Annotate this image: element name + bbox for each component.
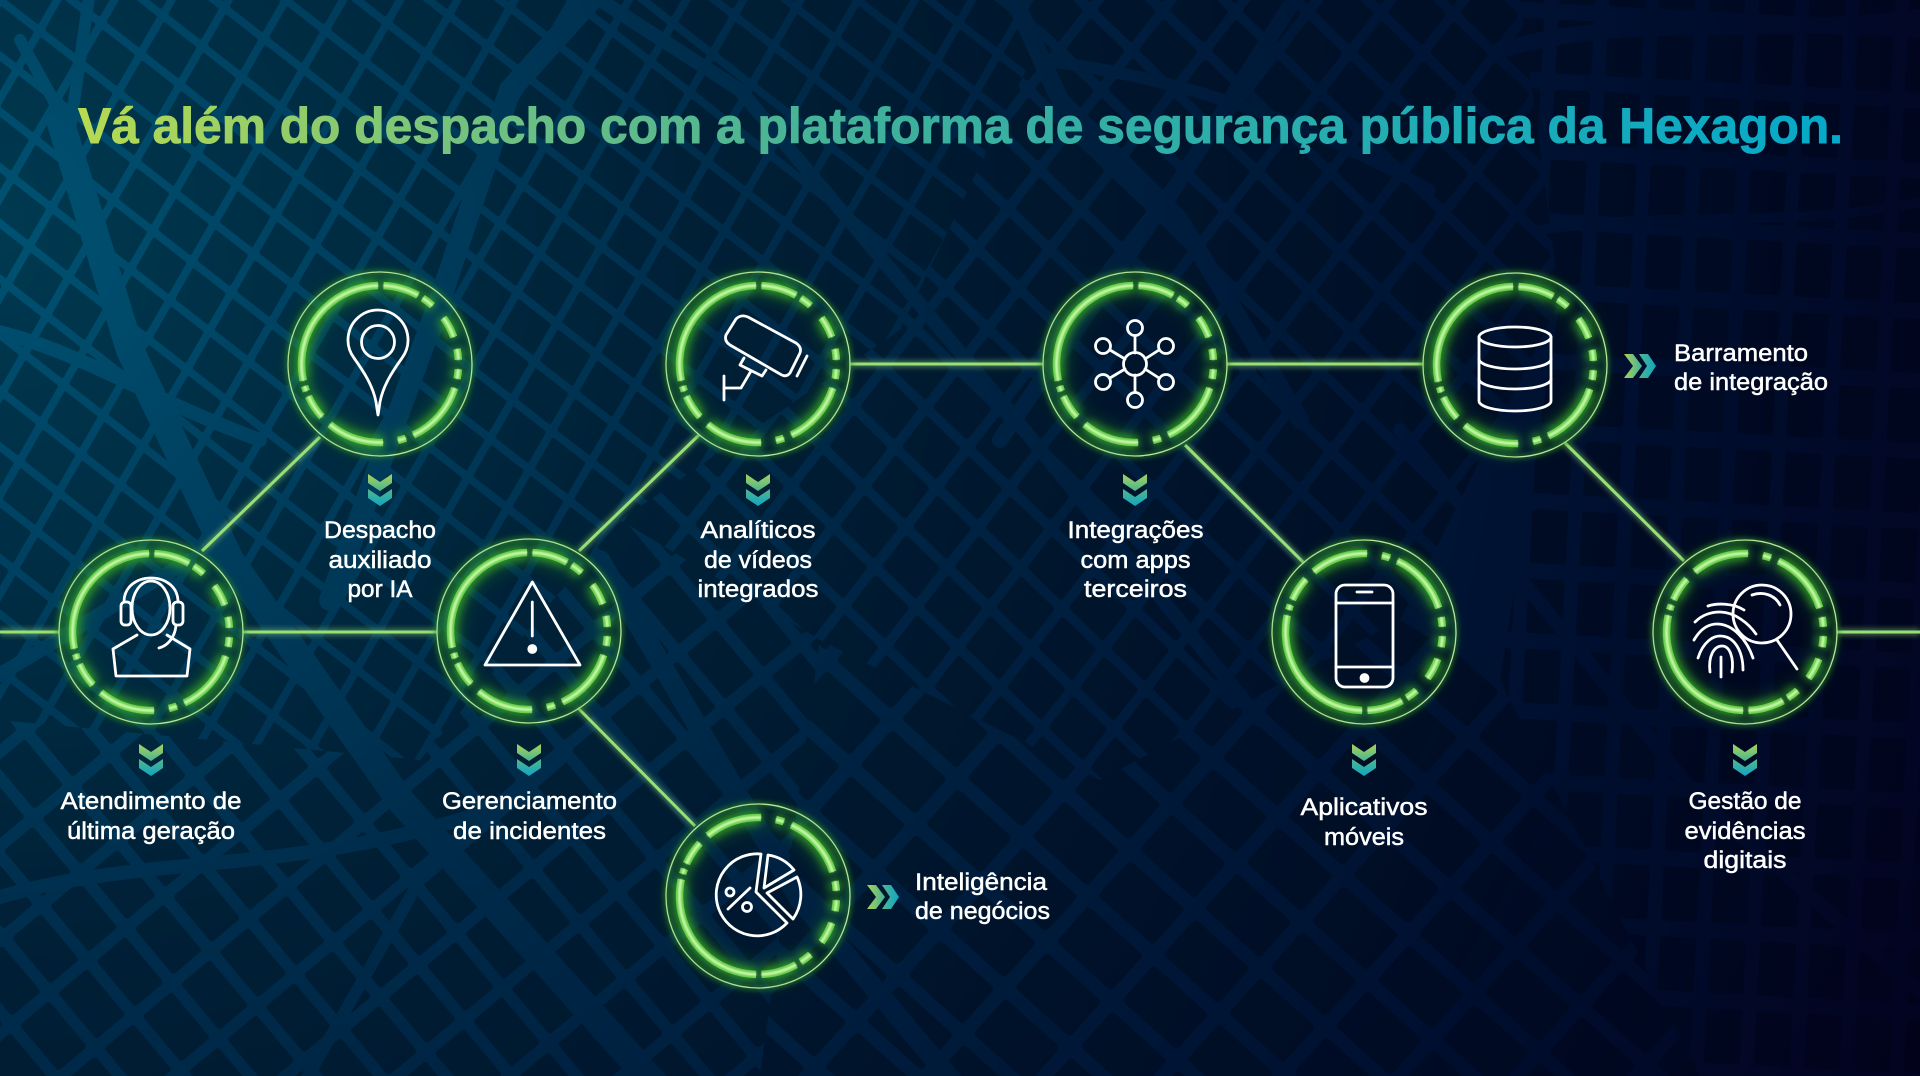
ring [1653,540,1837,724]
label: digitais [1704,847,1786,874]
chevron down [1733,744,1757,776]
label: evidências [1684,818,1806,845]
icon: smartphone [1336,585,1393,687]
label: por IA [348,576,413,603]
label: Integrações [1068,517,1204,544]
label [324,517,436,603]
ring [1043,272,1227,456]
label: móveis [1324,824,1404,851]
node: Analíticos de vídeos integrados [666,272,850,603]
label: de integração [1674,369,1828,396]
label: de vídeos [704,547,812,574]
label: Despacho [324,517,436,544]
connector: Analíticos to Integrações [850,362,1043,366]
label: Aplicativos [1300,794,1428,821]
icon: warning triangle [485,582,580,665]
label: Analíticos [700,517,816,544]
chevron down [368,474,392,506]
label: Barramento [1674,340,1808,367]
label [442,788,617,845]
node: Integrações com apps terceiros [1043,272,1227,603]
connector: Integrações to Barramento [1227,362,1423,366]
label [1674,340,1828,396]
label: com apps [1080,547,1190,574]
label: de incidentes [453,818,606,845]
label: Gerenciamento [442,788,617,815]
chevron right [1624,354,1656,378]
icon: network hub [1096,320,1174,408]
ring [59,540,243,724]
icon: pie chart [716,854,801,936]
ring [666,804,850,988]
label: terceiros [1084,576,1187,603]
node: Atendimento de última geração [59,540,243,845]
label: auxiliado [328,547,432,574]
chevron down [1352,744,1376,776]
connector: Barramento to Gestão [1565,443,1684,561]
node: Gerenciamento de incidentes [437,539,621,845]
label [1684,788,1806,874]
label: última geração [67,818,235,845]
label: de negócios [915,898,1050,925]
chevron down [1123,474,1147,506]
ring [666,272,850,456]
icon: security camera [724,316,807,400]
icon: database [1479,327,1551,411]
connector: Atendimento to Gerenciamento [243,630,437,634]
connector: Gerenciamento to Inteligência [578,708,695,826]
chevron down [746,474,770,506]
label [60,788,242,845]
label: integrados [698,576,818,603]
title: Vá além do despacho com a plataforma de segurança pública da Hexagon. [78,98,1843,154]
chevron right [867,885,899,909]
connector: Gerenciamento to Analíticos [579,435,699,551]
label: Atendimento de [60,788,242,815]
ring [1423,273,1607,457]
icon: map pin [348,310,408,415]
label [1068,517,1204,603]
ring [288,272,472,456]
node: Despacho auxiliado por IA [288,272,472,603]
node: Inteligência de negócios [666,804,1050,988]
ring [1272,540,1456,724]
connector: Integrações to Aplicativos [1185,445,1304,563]
ring [437,539,621,723]
connector lines [0,364,1920,826]
label [915,869,1050,925]
label: Inteligência [915,869,1047,896]
icon: headset agent [113,578,190,676]
connector: left edge to Atendimento [0,630,59,634]
node: Aplicativos móveis [1272,540,1456,851]
node: Gestão de evidências digitais [1653,540,1837,874]
connector: Gestão to right edge [1837,630,1920,634]
label [698,517,818,603]
icon: fingerprint and magnifier [1694,585,1797,677]
node: Barramento de integração [1423,273,1828,457]
label [1300,794,1428,851]
connector: Atendimento to Despacho [202,437,320,551]
label: Gestão de [1688,788,1802,815]
chevron down [139,744,163,776]
chevron down [517,744,541,776]
